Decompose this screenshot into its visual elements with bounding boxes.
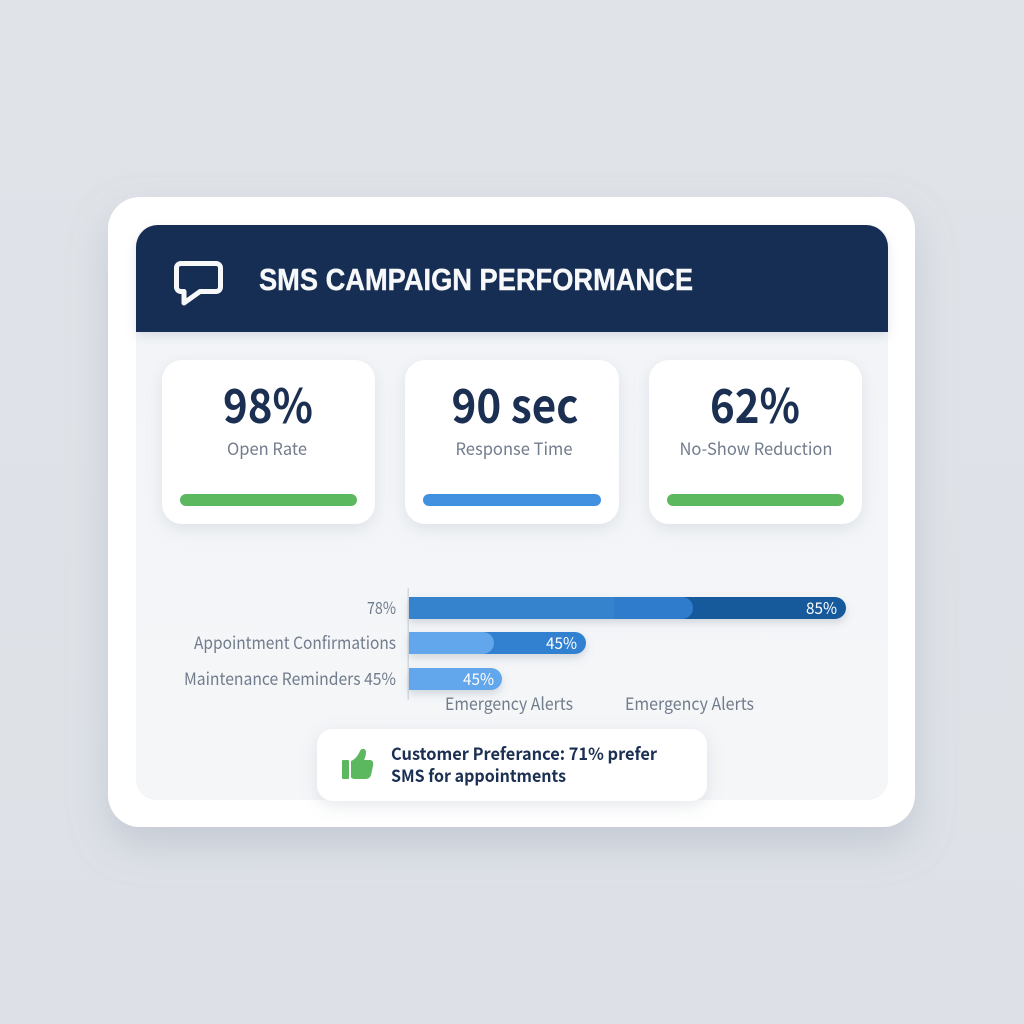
progress bar [423, 494, 601, 506]
panel: response time metric [405, 360, 619, 524]
callout: customer preference [317, 729, 707, 801]
callout text: Customer Preferance: 71% prefer [391, 740, 658, 765]
panel: open rate metric [162, 360, 375, 524]
icon: thumbs up [342, 749, 373, 779]
value: 45% [546, 630, 577, 654]
panel: no-show reduction metric [649, 360, 862, 524]
bar row 1 [409, 595, 846, 619]
value: 98% [223, 368, 313, 437]
label: Open Rate [227, 435, 307, 460]
label: No-Show Reduction [680, 435, 832, 460]
header bar [136, 225, 888, 332]
title: SMS CAMPAIGN PERFORMANCE [259, 262, 693, 297]
panel: dashboard card [108, 197, 915, 827]
value: 90 sec [452, 368, 578, 437]
value: 45% [463, 666, 494, 690]
axis label 2: Emergency Alerts [625, 690, 754, 715]
bar chart [184, 588, 846, 715]
progress bar [667, 494, 844, 506]
row label 1: 78% [367, 594, 396, 619]
bar row 2 [409, 630, 586, 654]
label: Response Time [456, 435, 572, 460]
row label 3: Maintenance Reminders 45% [184, 665, 396, 690]
value: 85% [806, 595, 837, 619]
bar row 3 [409, 666, 502, 690]
axis label 1: Emergency Alerts [445, 690, 573, 715]
row label 2: Appointment Confirmations [194, 629, 396, 654]
icon: chat bubble [176, 264, 220, 303]
value: 62% [710, 368, 800, 437]
callout: customer preference: SMS for appointments [391, 762, 566, 787]
progress bar [180, 494, 357, 506]
